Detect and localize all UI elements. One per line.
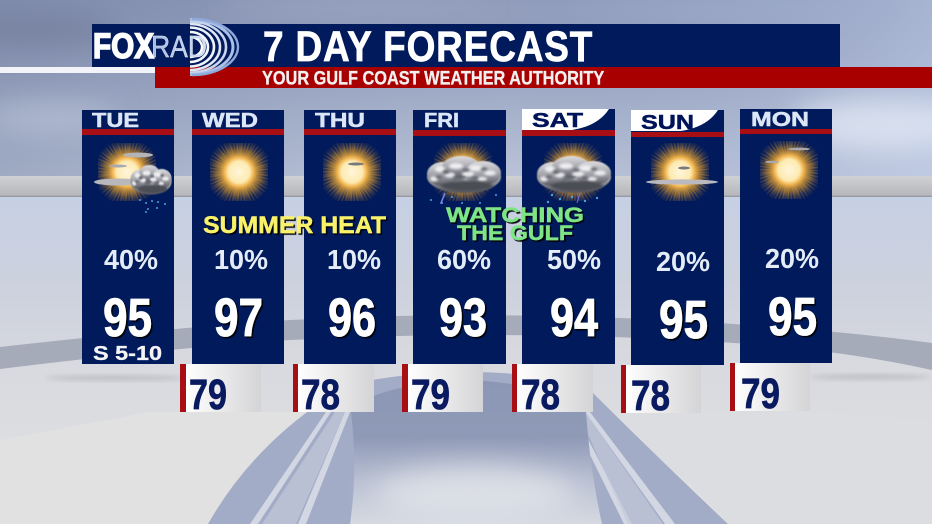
low temperature: Wednesday: 79 xyxy=(189,371,227,419)
title: 7 DAY FORECAST xyxy=(263,23,593,71)
day label: SUN xyxy=(641,112,694,134)
icon: sun with storm cloud xyxy=(94,142,172,213)
chance of rain: 40% xyxy=(104,244,158,275)
high temperature: 94 xyxy=(550,288,598,348)
chance of rain: 60% xyxy=(437,244,491,275)
panel: Thursday xyxy=(304,110,396,364)
chance of rain: 10% xyxy=(214,244,268,275)
day label: TUE xyxy=(92,110,139,132)
chance of rain: 20% xyxy=(656,246,710,277)
high temperature: 95 xyxy=(659,290,708,350)
panel: Saturday xyxy=(522,109,615,364)
chance of rain: 10% xyxy=(327,244,381,275)
wind: S 5-10 xyxy=(93,343,162,365)
low temperature: Thursday xyxy=(293,364,374,419)
white day tab xyxy=(522,109,609,130)
icon: mostly sunny xyxy=(322,142,382,202)
low temperature: Monday: 79 xyxy=(741,370,780,418)
high temperature: 97 xyxy=(214,288,263,348)
high temperature: 96 xyxy=(328,288,376,348)
icon: thunderstorm xyxy=(537,142,611,203)
callout: watching the gulf: WATCHING xyxy=(446,204,584,227)
icon: mostly sunny with cloud xyxy=(646,142,718,202)
header: red subtitle bar xyxy=(155,67,932,89)
day label: FRI xyxy=(424,110,459,132)
icon: sun xyxy=(209,142,269,202)
low temperature: Sunday: 78 xyxy=(631,372,670,420)
callout: watching the gulf xyxy=(446,204,584,245)
icon: thunderstorm xyxy=(427,142,501,204)
white day tab xyxy=(631,110,718,131)
callout: summer heat: SUMMER HEAT xyxy=(203,212,386,239)
panel: Monday xyxy=(740,109,832,363)
high temperature: 95 xyxy=(103,288,152,348)
low temperature: Saturday: 78 xyxy=(521,371,560,419)
logo wordmark RAD: RAD xyxy=(151,29,207,64)
panel: Wednesday xyxy=(192,110,284,364)
logo wordmark FOX: FOX xyxy=(93,27,155,66)
panel: Tuesday xyxy=(82,110,174,365)
day label: THU xyxy=(315,110,365,132)
callout: watching the gulf: THE GULF xyxy=(457,222,573,245)
high temperature: 95 xyxy=(768,287,817,347)
subtitle: YOUR GULF COAST WEATHER AUTHORITY xyxy=(262,67,604,89)
FOX RAD logo xyxy=(93,19,238,75)
low temperature: Thursday: 78 xyxy=(301,371,340,419)
chance of rain: 20% xyxy=(765,243,819,274)
white accent line xyxy=(0,67,155,73)
header: navy title bar xyxy=(92,23,840,71)
day label: MON xyxy=(751,109,809,131)
low temperature: Monday xyxy=(730,363,810,418)
low temperature: Friday xyxy=(402,364,483,419)
day label: WED xyxy=(202,110,258,132)
high temperature: 93 xyxy=(439,288,487,348)
low temperature: Friday: 79 xyxy=(411,371,450,419)
low temperature: Wednesday xyxy=(180,364,261,419)
panel: Sunday xyxy=(631,110,724,365)
low temperature: Sunday xyxy=(621,365,701,420)
icon: mostly sunny xyxy=(759,140,819,200)
panel: Friday xyxy=(413,110,506,364)
day label: SAT xyxy=(532,110,583,132)
low temperature: Saturday xyxy=(512,364,593,419)
chance of rain: 50% xyxy=(547,244,601,275)
